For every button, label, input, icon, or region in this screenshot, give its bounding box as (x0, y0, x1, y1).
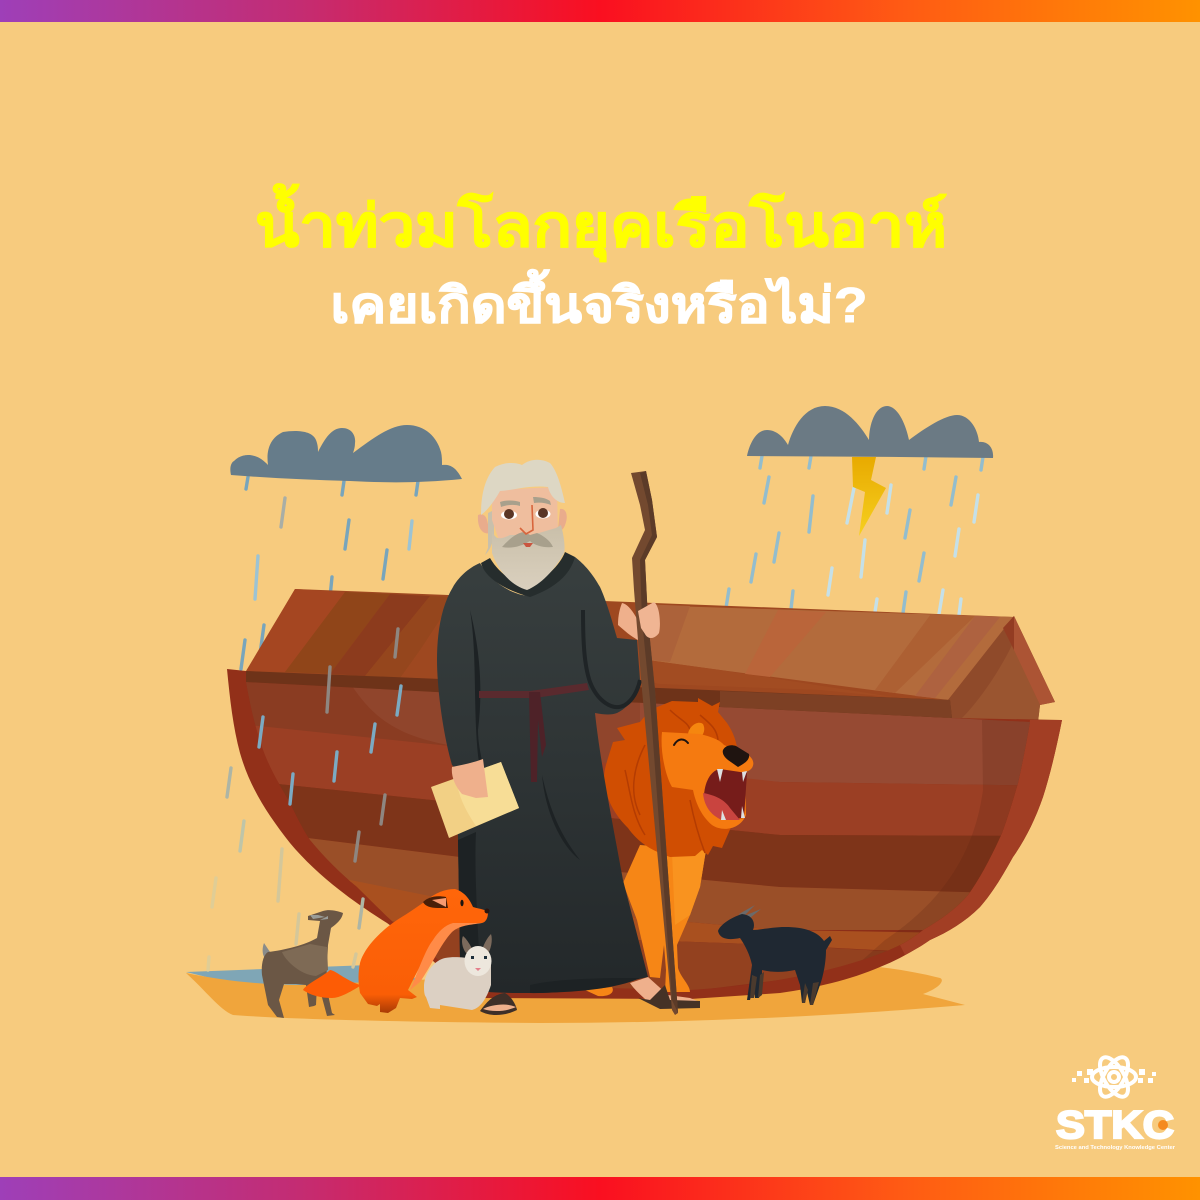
lightning bolt (852, 457, 886, 536)
robe folds (458, 610, 640, 993)
lion face (662, 732, 753, 829)
beard (492, 525, 565, 590)
ark roof (246, 589, 1014, 702)
rain over ark on left (208, 629, 401, 970)
right palm (618, 603, 642, 642)
ark hull outer shell (227, 669, 1062, 999)
rabbit nose (475, 968, 481, 971)
title (255, 184, 947, 333)
eyes (501, 508, 550, 520)
rabbit ears (462, 934, 492, 955)
ground (186, 962, 965, 1023)
moustache (502, 532, 553, 548)
robe collar (481, 552, 575, 597)
logo (1055, 1053, 1176, 1151)
head (478, 460, 567, 590)
belt tie (529, 692, 546, 782)
nose (520, 505, 533, 534)
hair (481, 460, 565, 515)
ark hull right outer highlight (900, 720, 1062, 955)
goat hooves (750, 972, 819, 1005)
lion mane (604, 698, 742, 857)
bottom gradient bar (0, 1177, 1200, 1200)
title line 1: น้ำท่วมโลกยุคเรือโนอาห์ (255, 184, 947, 263)
title line 2: เคยเกิดขึ้นจริงหรือไม่? (330, 269, 868, 333)
logo dots (1072, 1069, 1156, 1083)
book (431, 762, 519, 838)
fox (303, 889, 490, 1013)
fox tail (303, 970, 360, 998)
fox eye (460, 900, 464, 906)
rabbit (424, 934, 492, 1010)
mouth (523, 543, 533, 547)
man (431, 460, 700, 1015)
lion body (623, 845, 706, 992)
lion teeth (717, 769, 747, 820)
logo orange dot (1158, 1120, 1168, 1130)
belt (479, 683, 589, 698)
goat horn (310, 915, 328, 920)
illustration: sand ground and water (186, 962, 965, 1023)
lion closed eye (674, 739, 688, 745)
water (186, 965, 440, 1002)
fox body (358, 889, 488, 1013)
logo tagline: Science and Technology Knowledge Center (1055, 1145, 1176, 1151)
ears (478, 509, 567, 533)
fox nose (484, 908, 490, 914)
left hand (452, 759, 488, 798)
sleeve lining (583, 610, 640, 707)
lion ear (688, 723, 704, 738)
rabbit eyes (471, 956, 487, 959)
lion (585, 698, 753, 996)
goat body (718, 914, 832, 1005)
right fingers on staff (638, 602, 660, 638)
back hair (485, 510, 494, 555)
logo wordmark: STKC (1056, 1104, 1174, 1147)
brown goat (262, 910, 343, 1018)
robe (437, 557, 648, 993)
right cloud (747, 406, 993, 458)
lion nose (723, 745, 749, 767)
black goat (718, 905, 832, 1005)
rabbit body (424, 957, 491, 1010)
ark (220, 589, 1070, 1010)
face (492, 487, 558, 548)
logo atom icon (1092, 1053, 1136, 1101)
left cloud (230, 425, 462, 482)
top gradient bar (0, 0, 1200, 22)
ark hull planks (246, 682, 1030, 990)
fox ear (423, 896, 448, 908)
right foot with sandal (630, 977, 700, 1009)
goat tail (263, 943, 270, 958)
goat horns (739, 905, 761, 922)
lion mouth (704, 769, 747, 820)
fox chest (410, 923, 482, 990)
left rain behind ark (241, 477, 418, 669)
staff (631, 471, 678, 1015)
lion back paw (585, 987, 613, 996)
right rain (726, 456, 983, 615)
goat body (262, 910, 343, 1018)
ark gable (948, 616, 1055, 722)
left sandal (480, 993, 517, 1015)
rabbit head (464, 946, 492, 976)
lion tongue (703, 793, 740, 820)
brows (500, 497, 551, 507)
ark rim band (246, 671, 952, 718)
